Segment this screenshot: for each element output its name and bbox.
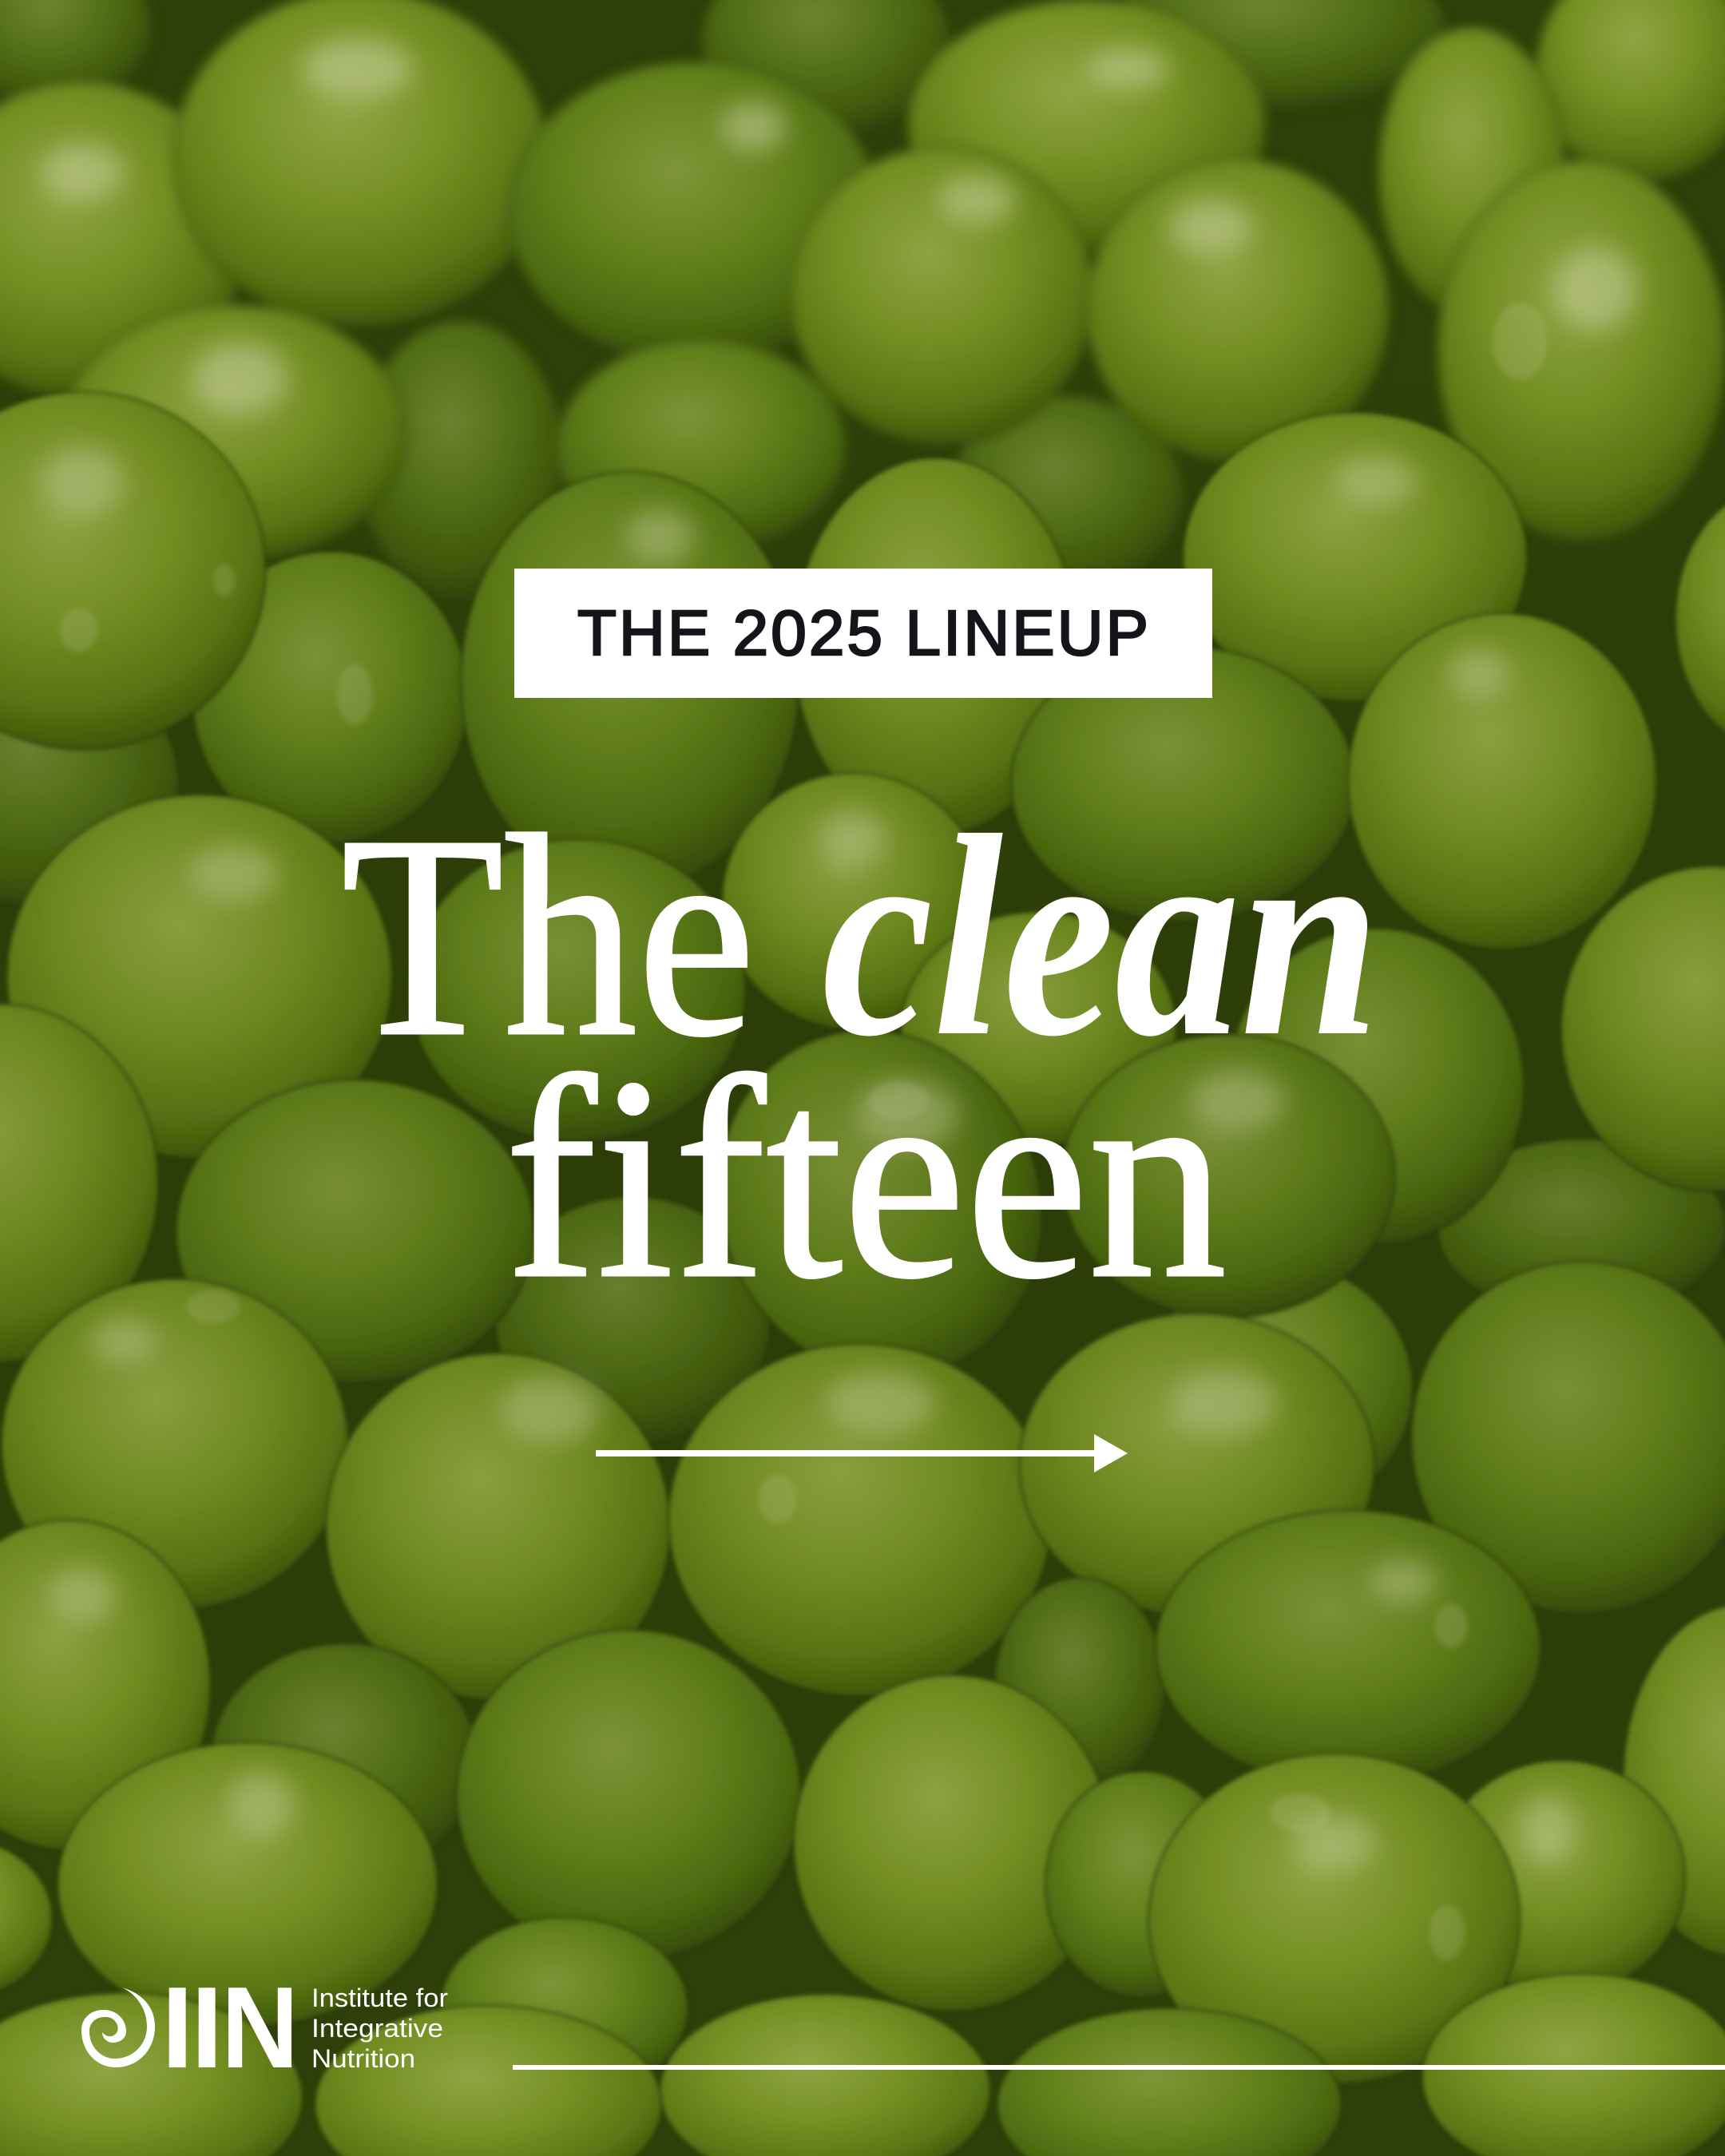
logo wordmark: II <box>161 1963 223 2092</box>
title: The clean fifteen: clean <box>822 776 1380 1096</box>
arrow <box>596 1434 1128 1472</box>
logo name <box>311 1984 448 2073</box>
logo wordmark: N <box>221 1963 299 2092</box>
icon: spiral <box>81 1988 155 2067</box>
logo: Institute for Integrative Nutrition <box>81 1963 448 2092</box>
title: The clean fifteen <box>341 776 1380 1338</box>
logo name: Institute for <box>311 1984 448 2012</box>
tag: the 2025 lineup: THE 2025 LINEUP <box>577 597 1148 668</box>
logo name: Nutrition <box>311 2044 415 2073</box>
logo name: Integrative <box>311 2014 443 2043</box>
tag: the 2025 lineup <box>514 569 1212 698</box>
title: The clean fifteen: fifteen <box>505 1018 1227 1338</box>
title: The clean fifteen: The <box>341 776 755 1096</box>
footer line <box>513 2065 1725 2070</box>
